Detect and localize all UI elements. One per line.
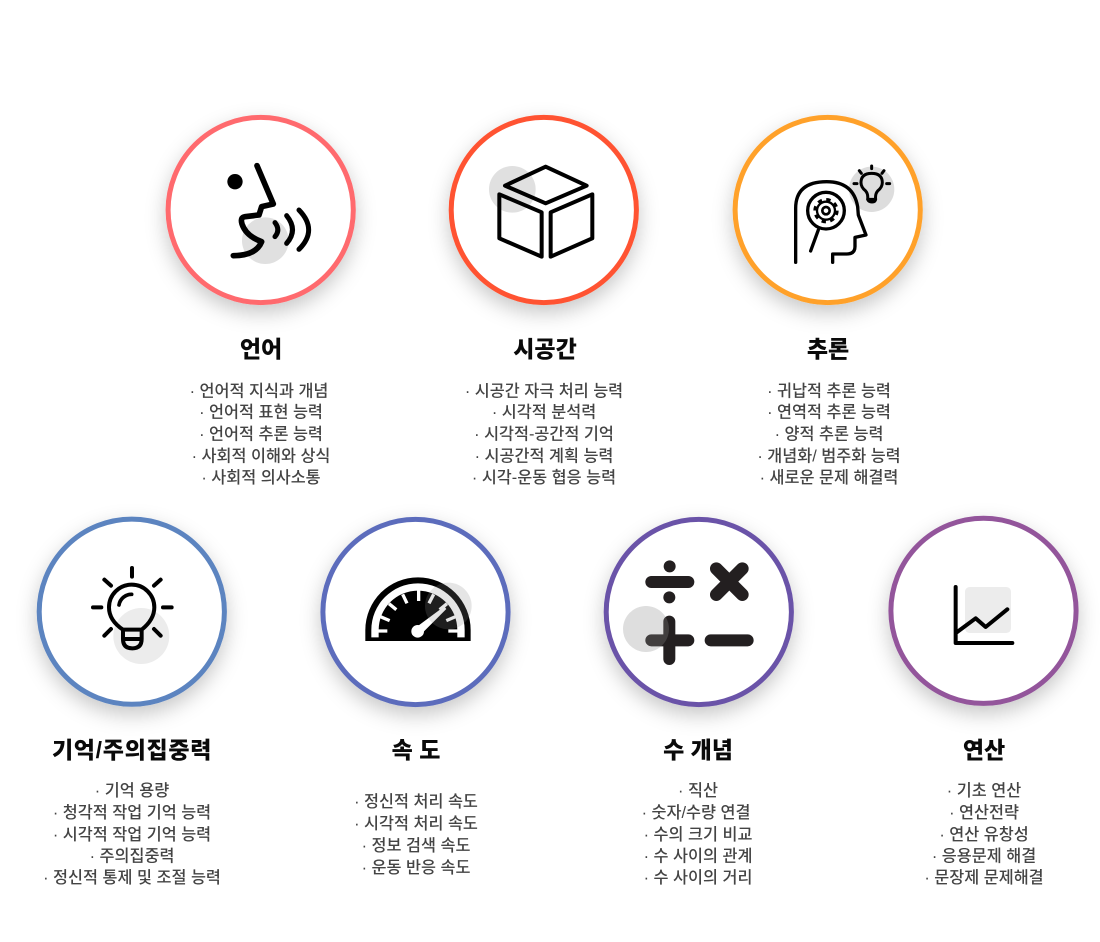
text block: 속도 items: · 운동 반응 속도 (362, 859, 470, 877)
ring: 추론 (735, 117, 920, 303)
panel: 수 개념 (606, 519, 791, 887)
text block: 기억 items (43, 782, 221, 887)
text block: 수 개념 items: · 숫자/수량 연결 (642, 804, 750, 822)
panel: 추론 (735, 117, 920, 487)
panel: 연산 (891, 518, 1076, 887)
text block: 속도 items: · 시각적 처리 속도 (354, 815, 478, 833)
heading: 연산: 연산 (963, 737, 1005, 763)
text block: 기억 items: · 청각적 작업 기억 능력 (53, 804, 211, 822)
heading: 수 개념: 수 개념 (663, 737, 733, 763)
text block: 수 개념 items: · 직산 (678, 782, 718, 800)
text block: 속도 items: · 정신적 처리 속도 (354, 793, 478, 811)
text block: 연산 items: · 문장제 문제해결 (924, 869, 1044, 887)
text block: 언어 items: · 사회적 이해와 상식 (192, 448, 330, 466)
text block: 수 개념 items: · 수의 크기 비교 (644, 826, 752, 844)
heading: 추론: 추론 (807, 336, 849, 362)
text block: 언어 items: · 언어적 추론 능력 (199, 426, 323, 444)
text block: 연산 items: · 연산 유창성 (939, 826, 1029, 844)
text block: 연산 items: · 연산전략 (949, 804, 1019, 822)
text block: 언어 items: · 언어적 표현 능력 (199, 404, 323, 422)
icon: math operators (623, 560, 748, 659)
text block: 시공간 items: · 시공간적 계획 능력 (475, 448, 613, 466)
ring: 기억/주의집중력 (39, 519, 224, 704)
text block: 추론 items: · 개념화/ 범주화 능력 (757, 448, 901, 466)
text block: 연산 items: · 응용문제 해결 (932, 848, 1036, 866)
icon: speaking face (227, 166, 309, 264)
text block: 수 개념 items: · 수 사이의 관계 (644, 848, 752, 866)
text block: 추론 items: · 연역적 추론 능력 (767, 404, 891, 422)
text block: 시공간 items: · 시각-운동 협응 능력 (472, 469, 616, 487)
panel: 언어 (168, 117, 353, 487)
text block: 시공간 items: · 시각적-공간적 기억 (474, 426, 614, 444)
text block: 언어 items (190, 382, 330, 487)
text block: 추론 items: · 양적 추론 능력 (775, 426, 883, 444)
text block: 기억 items: · 정신적 통제 및 조절 능력 (43, 869, 221, 887)
text block: 시공간 items: · 시공간 자극 처리 능력 (465, 382, 623, 400)
icon: cube (489, 166, 592, 257)
icon: line chart (956, 587, 1012, 643)
icon: light bulb (93, 568, 172, 664)
text block: 추론 items: · 귀납적 추론 능력 (767, 382, 891, 400)
ring: 속도 (323, 519, 508, 705)
text block: 연산 items: · 기초 연산 (947, 782, 1021, 800)
ring: 시공간 (451, 117, 636, 303)
icon: speedometer (365, 577, 472, 641)
ring: 언어 (168, 117, 353, 303)
text block: 언어 items: · 사회적 의사소통 (201, 469, 321, 487)
text block: 기억 items: · 시각적 작업 기억 능력 (53, 826, 211, 844)
panel: 시공간 (451, 117, 636, 487)
text block: 시공간 items (465, 382, 623, 487)
text block: 수 개념 items (642, 782, 752, 887)
text block: 시공간 items: · 시각적 분석력 (492, 404, 596, 422)
ring: 수 개념 (606, 519, 791, 705)
text block: 수 개념 items: · 수 사이의 거리 (644, 869, 752, 887)
text block: 언어 items: · 언어적 지식과 개념 (190, 382, 328, 400)
panel: 기억/주의집중력 (39, 519, 224, 887)
heading: 시공간: 시공간 (513, 336, 577, 362)
text block: 추론 items: · 새로운 문제 해결력 (760, 469, 898, 487)
text block: 기억 items: · 기억 용량 (95, 782, 169, 800)
text block: 속도 items (354, 793, 478, 877)
heading: 언어: 언어 (240, 336, 282, 362)
text block: 추론 items (757, 382, 901, 487)
text block: 속도 items: · 정보 검색 속도 (362, 837, 470, 855)
text block: 연산 items (924, 782, 1044, 887)
panel: 속도 (323, 519, 508, 877)
ring: 연산 (891, 518, 1076, 703)
heading: 기억/주의집중력: 기억/주의집중력 (52, 737, 212, 763)
icon: head with gear and bulb (796, 166, 894, 262)
heading: 속 도: 속 도 (392, 737, 440, 763)
text block: 기억 items: · 주의집중력 (90, 848, 174, 866)
